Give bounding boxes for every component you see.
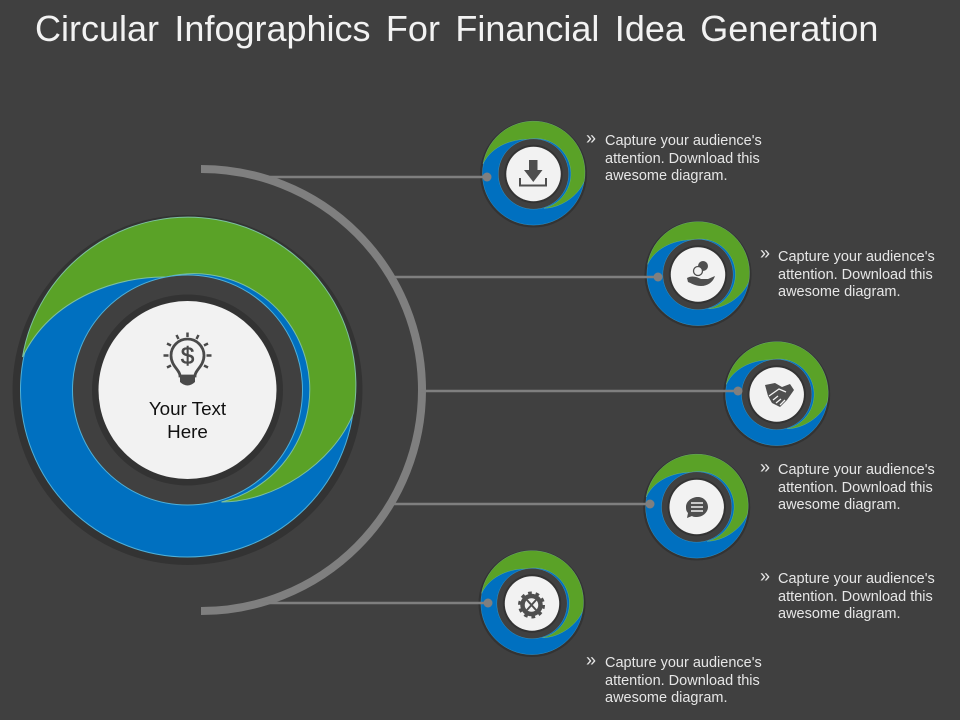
text block 5 — [586, 650, 762, 706]
icon: hand and coin — [687, 261, 715, 286]
node 4: chat — [643, 453, 750, 561]
icon: gear with tools — [520, 593, 544, 617]
text block 2: attention. Download this — [778, 267, 933, 283]
icon: handshake — [765, 383, 794, 407]
title: Circular Infographics For Financial Idea Generation — [35, 8, 878, 49]
text block 4: attention. Download this — [778, 480, 933, 496]
text block 3 — [760, 566, 935, 622]
text block 4: awesome diagram. — [778, 497, 900, 513]
text block 4: Capture your audience's — [778, 462, 935, 478]
text block 5: Capture your audience's — [605, 655, 762, 671]
text block 3: awesome diagram. — [778, 606, 900, 622]
node 2: hand with coin — [644, 221, 752, 328]
node 1: download — [480, 120, 587, 228]
icon: light bulb with dollar: $ — [181, 343, 194, 370]
node 5: gear — [478, 550, 586, 657]
text block 3: attention. Download this — [778, 589, 933, 605]
text block 1: » — [586, 128, 596, 148]
text block 1 — [586, 128, 762, 184]
large gray arc — [201, 169, 422, 611]
node 3: handshake — [723, 341, 830, 448]
text block 4: » — [760, 457, 770, 477]
text block 1: Capture your audience's — [605, 133, 762, 149]
text block 2: » — [760, 243, 770, 263]
text block 3: » — [760, 566, 770, 586]
central swirl circle — [12, 215, 362, 565]
text block 2: Capture your audience's — [778, 249, 935, 265]
connector lines with end dots — [262, 172, 742, 608]
text block 5: attention. Download this — [605, 673, 760, 689]
icon: speech bubble — [686, 497, 708, 518]
text block 2: awesome diagram. — [778, 284, 900, 300]
text block 5: awesome diagram. — [605, 690, 728, 706]
icon: download — [519, 160, 547, 186]
text block 4 — [760, 457, 935, 513]
center label: Your Text — [149, 398, 227, 419]
text block 5: » — [586, 650, 596, 670]
text block 1: attention. Download this — [605, 151, 760, 167]
text block 2 — [760, 243, 935, 300]
central swirl circle: Here — [167, 421, 208, 442]
text block 1: awesome diagram. — [605, 168, 728, 184]
icon: light bulb with dollar — [164, 332, 212, 386]
text block 3: Capture your audience's — [778, 571, 935, 587]
